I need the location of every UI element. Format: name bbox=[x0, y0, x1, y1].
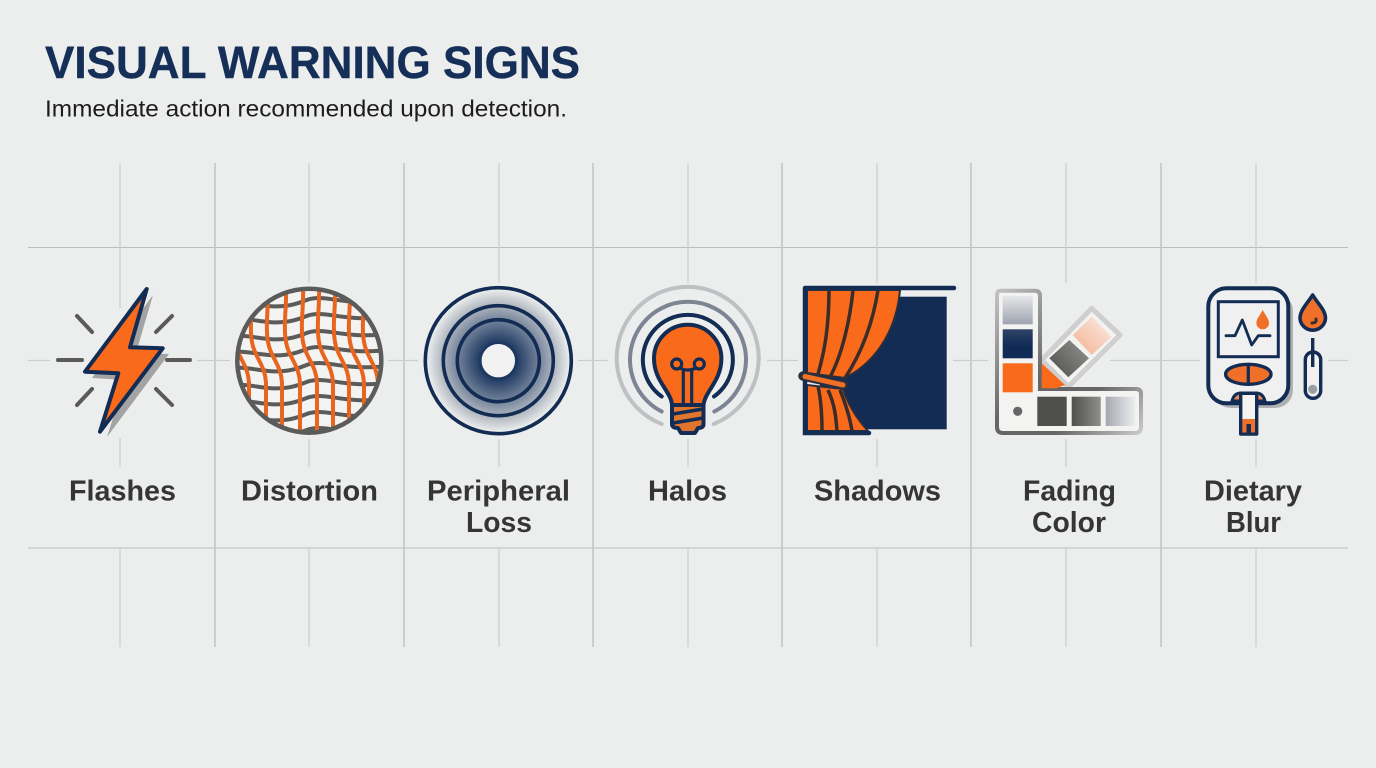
label: Shadows: Shadows bbox=[814, 476, 941, 508]
label: Fading Color: Fading bbox=[1023, 476, 1116, 508]
icon: shadows curtain bbox=[803, 288, 954, 433]
icon: flashes lightning bolt bbox=[58, 289, 190, 437]
icon: peripheral loss rings bbox=[425, 288, 571, 434]
icon: dietary blur glucose meter bbox=[1208, 288, 1326, 434]
icon: halos light bulb bbox=[617, 287, 759, 433]
label: Peripheral Loss: Loss bbox=[466, 507, 532, 539]
title: VISUAL WARNING SIGNS bbox=[45, 37, 580, 88]
infographic canvas bbox=[28, 46, 1348, 647]
label: Dietary Blur: Blur bbox=[1226, 507, 1281, 539]
label: Fading Color: Color bbox=[1032, 507, 1106, 539]
label: Halos: Halos bbox=[648, 476, 727, 508]
label: Flashes: Flashes bbox=[69, 476, 176, 508]
icon: fading color swatch fan bbox=[997, 291, 1141, 433]
label: Distortion: Distortion bbox=[241, 476, 378, 508]
label: Peripheral Loss: Peripheral bbox=[427, 476, 570, 508]
subtitle: Immediate action recommended upon detection. bbox=[45, 96, 567, 122]
icon: distortion warped grid bbox=[235, 286, 384, 435]
label: Dietary Blur: Dietary bbox=[1204, 476, 1302, 508]
